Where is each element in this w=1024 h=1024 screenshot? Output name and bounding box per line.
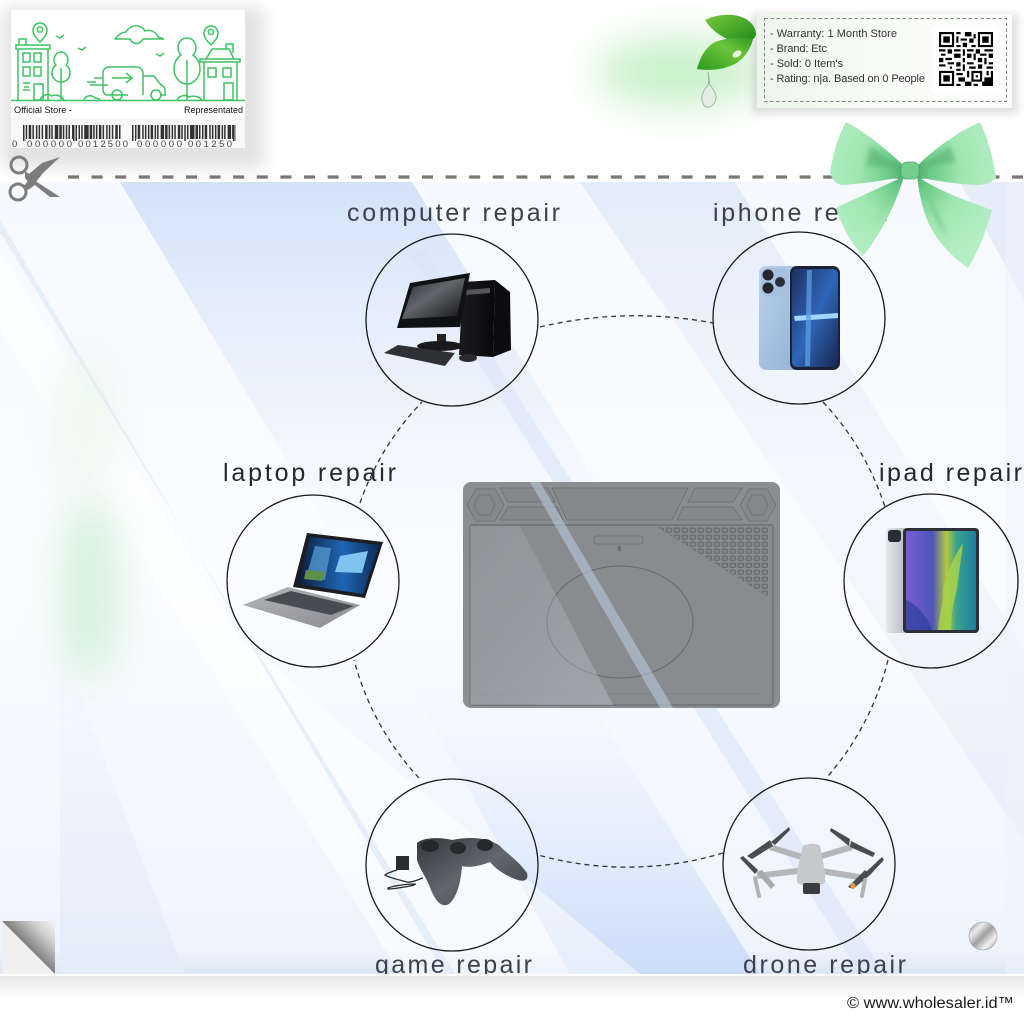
text: warranty: - Warranty: 1 Month Store (770, 28, 897, 40)
label: ipad repair: ipad repair (879, 459, 1022, 487)
node: ipad repair (844, 459, 1022, 668)
text: brand: - Brand: Etc (770, 43, 828, 55)
label: laptop repair: laptop repair (223, 459, 396, 487)
node: drone repair (723, 778, 906, 979)
icon: laptop (243, 533, 383, 628)
mat: glass reflection (470, 526, 613, 705)
QR code (933, 27, 998, 92)
node: computer repair (347, 199, 560, 406)
bow: knot (901, 162, 919, 179)
top-left card shadow (2, 8, 264, 168)
connector: dashed ring arcs between nodes (354, 316, 888, 867)
label: iphone repair: iphone repair (713, 199, 891, 227)
product: repair mat (463, 482, 780, 708)
panel: diagonal striped background (0, 182, 1024, 974)
green glow behind leaf and info card (595, 36, 765, 108)
label: drone repair: drone repair (743, 951, 906, 979)
bow: left loop (830, 122, 904, 185)
barcode digits: 000000 (27, 139, 72, 150)
icon: desktop computer (384, 273, 511, 366)
barcode digits: 0 (12, 139, 17, 150)
bottom shadow strip (0, 976, 1024, 1000)
dashed cut line (68, 175, 1024, 179)
bow: right tail (917, 176, 992, 268)
label: game repair: game repair (375, 951, 532, 979)
barcode digits: 000000 (137, 139, 182, 150)
barcode digits: 001250 (188, 139, 232, 150)
node: game repair (366, 779, 538, 979)
decorative: green bow (830, 122, 996, 268)
text: rating: - Rating: n|a. Based on 0 People (770, 73, 925, 85)
text: official store: Official Store - (14, 105, 72, 115)
barcode digits: 0012500 (78, 139, 128, 150)
panel: store label card (11, 10, 245, 150)
mat: main recess (470, 525, 773, 705)
barcode digits (12, 139, 233, 150)
bow: right loop (917, 122, 996, 185)
icon: page fold corner (2, 921, 55, 974)
icon: drone (740, 827, 884, 896)
text: representated: Representated (184, 105, 243, 115)
bow: left tail (836, 176, 904, 256)
mat: top compartments (467, 488, 776, 521)
barcode (23, 125, 236, 141)
icon: metal button (969, 922, 997, 950)
mat: circle outline (547, 566, 693, 678)
icon: iphone (759, 266, 840, 370)
text: copyright: © www.wholesaler.id™ (847, 995, 1014, 1012)
icon: green leaves with water drop (697, 15, 756, 107)
bow: fold shading (866, 146, 956, 238)
node: iphone repair (713, 199, 891, 404)
node: laptop repair (223, 459, 399, 667)
icon: game controller (385, 838, 527, 905)
mat: small slot (594, 536, 643, 544)
panel: product info card (752, 14, 1018, 114)
label: computer repair: computer repair (347, 199, 560, 227)
icon: ipad (886, 528, 979, 633)
icon: scissors (10, 157, 60, 200)
mat: hole grid (657, 527, 768, 597)
text: sold: - Sold: 0 Item's (770, 58, 844, 70)
illustration: green town and delivery truck (11, 23, 245, 100)
